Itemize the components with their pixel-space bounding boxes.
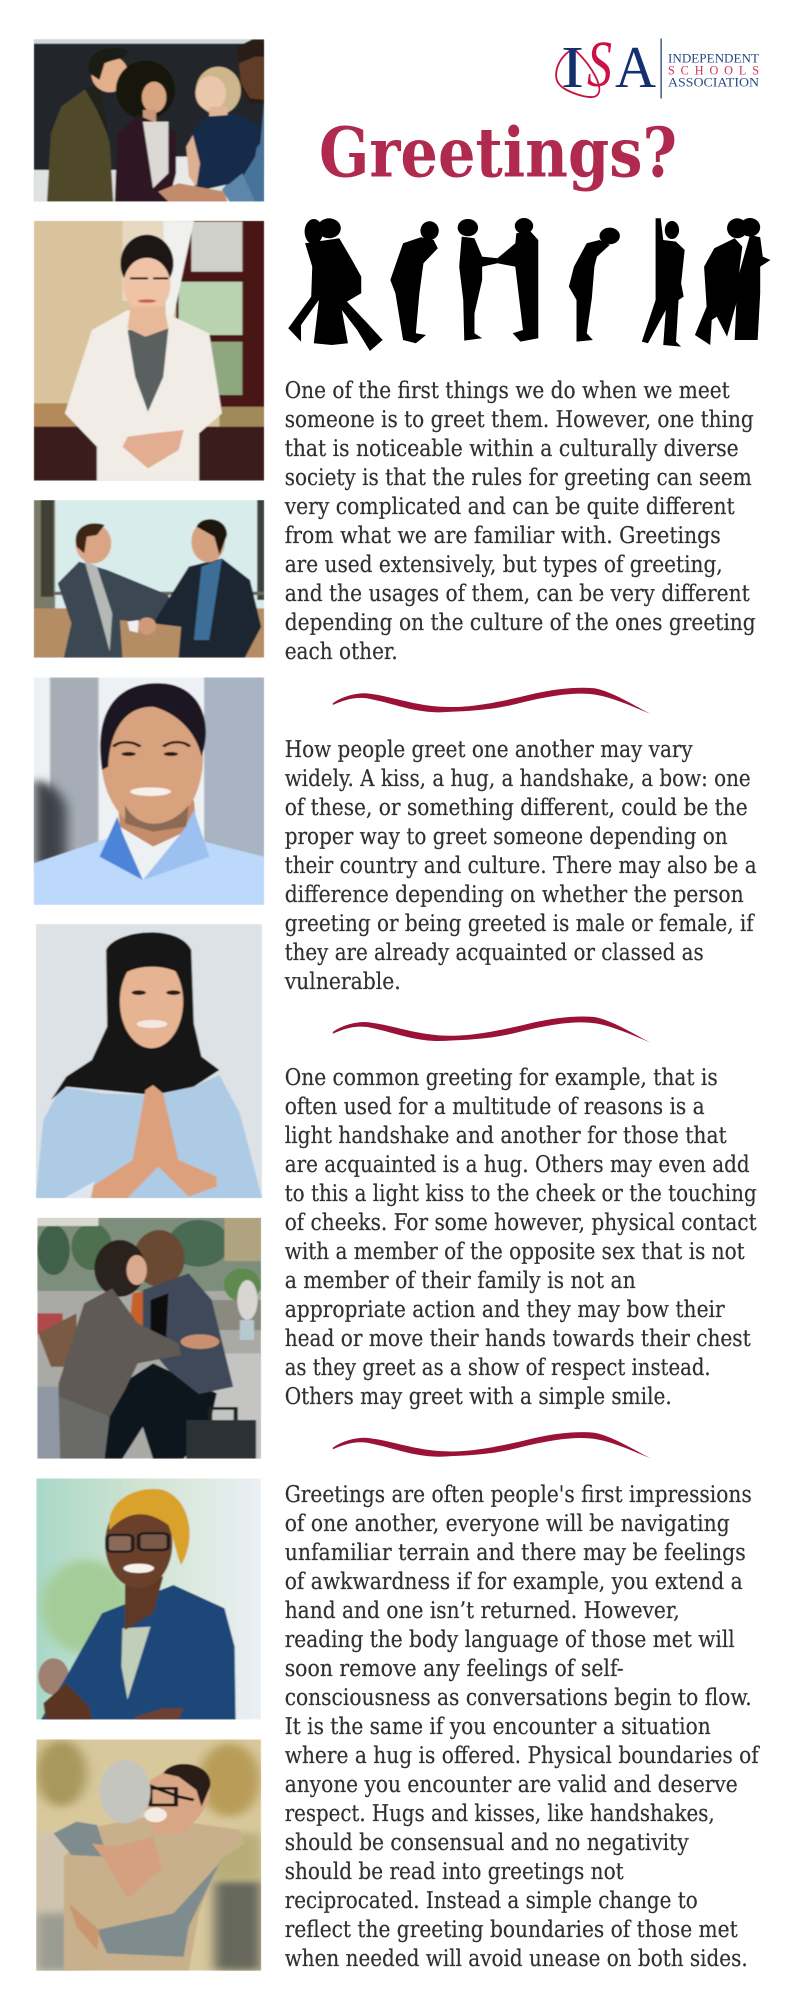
text block: common greeting: a member of their family is not an [285, 1268, 636, 1294]
text block: first impressions: reflect the greeting boundaries of those met [285, 1917, 738, 1943]
logo: Independent Schools Association: SCHOOLS [668, 64, 759, 78]
text block: first things we do: and the usages of them, can be very different [285, 581, 750, 607]
photo: woman in hijab with namaste hands [36, 924, 262, 1198]
photo: group of friends shaking hands [34, 39, 264, 202]
brush stroke divider 2 [332, 1016, 650, 1042]
text block: first things we do: very complicated and can be quite different [284, 494, 735, 520]
logo: Independent Schools Association: I [561, 34, 584, 100]
text block: how people greet: of these, or something different, could be the [285, 795, 748, 821]
text block: first impressions: reading the body language of those met will [285, 1627, 735, 1653]
text block: how people greet [284, 737, 757, 995]
text block: how people greet: How people greet one another may vary [285, 737, 693, 763]
text block: first impressions: of awkwardness if for example, you extend a [285, 1569, 743, 1595]
text block: first things we do [284, 378, 756, 665]
text block: first impressions: soon remove any feelings of self- [285, 1656, 624, 1682]
title: Greetings? [319, 114, 677, 194]
text block: first impressions: It is the same if you encounter a situation [285, 1714, 711, 1740]
text block: first impressions: of one another, everyone will be navigating [285, 1511, 730, 1537]
text block: first impressions: unfamiliar terrain and there may be feelings [285, 1540, 746, 1566]
text block: common greeting [285, 1065, 757, 1410]
logo: Independent Schools Association: INDEPENDENT [668, 52, 760, 66]
text block: first things we do: are used extensively, but types of greeting, [285, 552, 723, 578]
text block: how people greet: difference depending on whether the person [285, 882, 744, 908]
photo: two men hugging outdoors [36, 1739, 262, 1971]
text block: first things we do: each other. [285, 639, 398, 665]
text block: common greeting: light handshake and another for those that [285, 1123, 727, 1149]
text block: first things we do: that is noticeable within a culturally diverse [285, 436, 739, 462]
text block: first things we do: One of the first things we do when we meet [285, 378, 730, 404]
text block: how people greet: they are already acquainted or classed as [285, 940, 704, 966]
logo: Independent Schools Association [556, 28, 760, 101]
photo: smiling man in blue shirt [34, 677, 264, 905]
text block: first impressions [285, 1482, 760, 1972]
logo: Independent Schools Association: ASSOCIATION [668, 76, 759, 90]
text block: first impressions: should be consensual and no negativity [285, 1830, 689, 1856]
text block: common greeting: Others may greet with a simple smile. [285, 1384, 672, 1410]
text block: how people greet: proper way to greet someone depending on [285, 824, 728, 850]
text block: first impressions: should be read into greetings not [285, 1859, 624, 1885]
text block: first impressions: hand and one isn’t returned. However, [285, 1598, 680, 1624]
text block: common greeting: One common greeting for example, that is [285, 1065, 718, 1091]
text block: common greeting: as they greet as a show of respect instead. [285, 1355, 711, 1381]
text block: first impressions: reciprocated. Instead a simple change to [285, 1888, 698, 1914]
photo: two women kissing cheeks on a street [37, 1218, 262, 1459]
text block: common greeting: with a member of the opposite sex that is not [285, 1239, 745, 1265]
text block: how people greet: vulnerable. [284, 969, 401, 995]
logo: Independent Schools Association: A [615, 34, 656, 100]
text block: first impressions: anyone you encounter are valid and deserve [285, 1772, 738, 1798]
silhouettes of people greeting [288, 218, 770, 351]
photo: smiling woman in white blazer [34, 220, 264, 481]
photo: woman with yellow head wrap and glasses [36, 1478, 261, 1720]
text block: first things we do: from what we are familiar with. Greetings [285, 523, 721, 549]
photo: two businessmen shaking hands [34, 500, 264, 658]
text block: first impressions: respect. Hugs and kisses, like handshakes, [285, 1801, 715, 1827]
brush stroke divider 1 [332, 688, 650, 714]
logo: Independent Schools Association: S [587, 28, 612, 101]
text block: common greeting: appropriate action and they may bow their [285, 1297, 725, 1323]
text block: common greeting: often used for a multitude of reasons is a [285, 1094, 705, 1120]
brush stroke divider 3 [332, 1432, 650, 1458]
